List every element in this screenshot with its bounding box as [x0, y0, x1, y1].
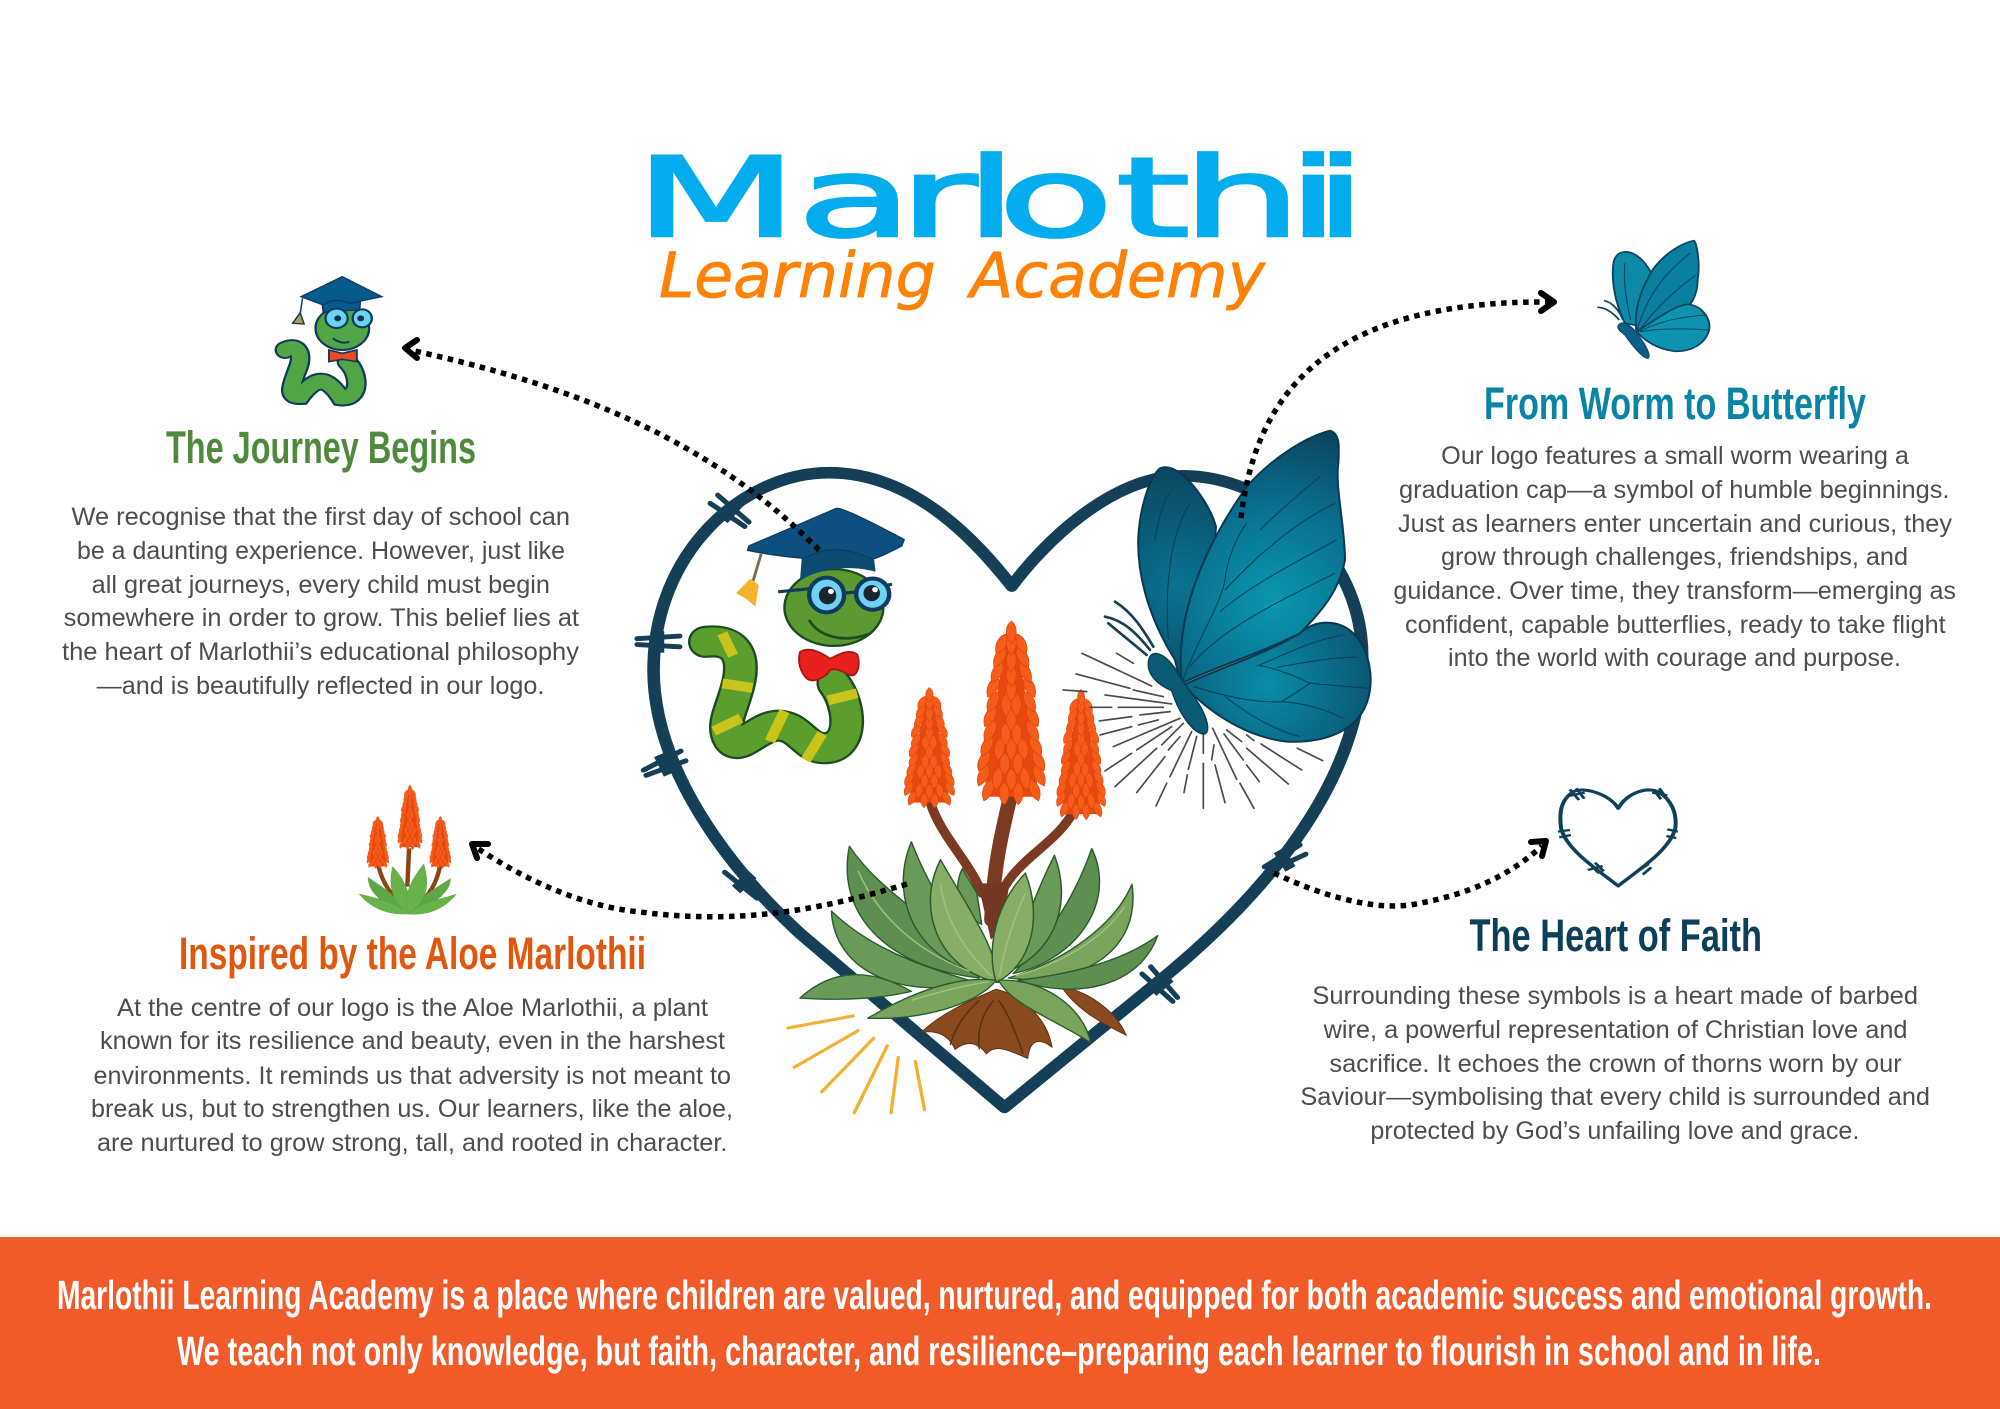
body text: are nurtured to grow strong, tall, and rooted in character. — [97, 1129, 727, 1157]
butterfly rear wing — [1138, 467, 1216, 680]
body text — [1300, 982, 1930, 1145]
butterfly body — [1148, 653, 1208, 734]
body text: be a daunting experience. However, just like — [77, 537, 565, 565]
worm glasses — [778, 578, 892, 612]
body text: grow through challenges, friendships, and — [1441, 543, 1908, 571]
icon: small aloe — [359, 785, 456, 914]
butterfly hind wing — [1183, 623, 1371, 742]
icon: small butterfly — [1597, 241, 1709, 358]
aloe flower spikes — [902, 620, 1108, 820]
banner text — [57, 1272, 1932, 1374]
body text: Our logo features a small worm wearing a — [1441, 442, 1909, 470]
butterfly fore wing — [1181, 431, 1345, 683]
panel: From Worm to Butterfly — [1393, 241, 1956, 672]
body text — [1393, 442, 1956, 672]
panel: Inspired by the Aloe Marlothii — [91, 785, 733, 1157]
body text: wire, a powerful representation of Christian love and — [1323, 1016, 1908, 1044]
bottom banner — [0, 1237, 2000, 1409]
body text: environments. It reminds us that adversity is not meant to — [94, 1062, 731, 1090]
worm illustration — [705, 508, 904, 760]
body text: Saviour—symbolising that every child is surrounded and — [1300, 1083, 1930, 1111]
heading: From Worm to Butterfly — [1484, 378, 1866, 429]
heading: The Journey Begins — [166, 422, 476, 473]
body text: somewhere in order to grow. This belief lies at — [64, 604, 579, 632]
butterfly rays — [1063, 653, 1323, 808]
dotted arrow: heart to The Heart of Faith — [1274, 841, 1546, 906]
body text: all great journeys, every child must begin — [92, 571, 550, 599]
body text — [62, 503, 579, 700]
worm bow tie — [799, 650, 859, 680]
logo — [635, 134, 1367, 312]
panel: The Heart of Faith — [1300, 788, 1930, 1145]
aloe sun rays — [788, 1016, 925, 1113]
body text: confident, capable butterflies, ready to take flight — [1405, 611, 1946, 639]
heading: The Heart of Faith — [1470, 910, 1762, 961]
aloe leaves — [800, 842, 1158, 1043]
central heart emblem — [637, 473, 1362, 1113]
body text: At the centre of our logo is the Aloe Marlothii, a plant — [117, 994, 708, 1022]
logo wordmark: Marlothii: Marlothii — [635, 134, 1367, 262]
butterfly veins — [1155, 477, 1368, 737]
body text: Just as learners enter uncertain and curious, they — [1398, 510, 1952, 538]
worm body — [705, 633, 857, 760]
body text: into the world with courage and purpose. — [1448, 644, 1901, 672]
icon: small worm with graduation cap — [285, 277, 382, 398]
dotted arrow: aloe to Inspired by the Aloe Marlothii — [472, 844, 907, 917]
worm head — [784, 569, 883, 646]
body text: Surrounding these symbols is a heart made of barbed — [1312, 982, 1918, 1010]
butterfly illustration — [1063, 431, 1371, 808]
aloe marlothii illustration — [788, 620, 1158, 1113]
dotted arrow: centre worm to The Journey Begins — [405, 340, 819, 550]
body text: —and is beautifully reflected in our logo. — [97, 672, 544, 700]
body text: sacrifice. It echoes the crown of thorns worn by our — [1329, 1050, 1902, 1078]
aloe stems — [931, 795, 1074, 938]
body text: guidance. Over time, they transform—emerging as — [1393, 577, 1956, 605]
logo tagline: Learning Academy: Learning Academy — [659, 239, 1266, 312]
panel: The Journey Begins — [62, 277, 579, 700]
butterfly antennae — [1105, 602, 1153, 655]
heading: Inspired by the Aloe Marlothii — [179, 928, 646, 979]
body text: break us, but to strengthen us. Our learners, like the aloe, — [91, 1095, 733, 1123]
body text — [91, 994, 733, 1157]
aloe roots — [921, 987, 1126, 1058]
dotted arrow: butterfly to From Worm to Butterfly — [1241, 293, 1554, 518]
body text: We recognise that the first day of school can — [72, 503, 570, 531]
graduation cap — [736, 508, 904, 607]
body text: the heart of Marlothii’s educational philosophy — [62, 638, 579, 666]
body text: known for its resilience and beauty, even in the harshest — [100, 1027, 725, 1055]
icon: small barbed wire heart — [1558, 788, 1678, 886]
body text: graduation cap—a symbol of humble beginnings. — [1399, 476, 1950, 504]
barbed wire heart — [637, 473, 1362, 1107]
body text: protected by God’s unfailing love and grace. — [1370, 1117, 1859, 1145]
